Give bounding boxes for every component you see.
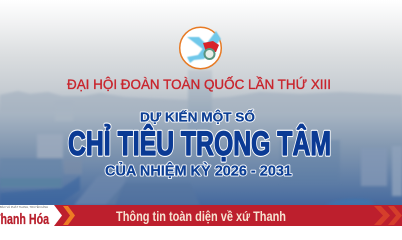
- logo panel: newspaper name: [0, 204, 62, 228]
- heading: congress name: ĐẠI HỘI ĐOÀN TOÀN QUỐC LẦN THỨ XIII: [67, 77, 331, 92]
- heading: intro line: DỰ KIẾN MỘT SỐ: [140, 110, 255, 124]
- heading: term line: CỦA NHIỆM KỲ 2026 - 2031: [105, 162, 292, 180]
- heading: intro line: DỰ KIẾN MỘT SỐ: [140, 110, 255, 124]
- icon: left chevrons: [63, 206, 75, 225]
- logo panel: newspaper name: BÁO VÀ PHÁT THANH, TRUYỀN HÌNH: [0, 204, 48, 209]
- slogan: Thông tin toàn diện về xứ Thanh: [116, 208, 286, 224]
- icon: stylised X: [187, 31, 221, 63]
- footer banner: [0, 204, 402, 228]
- logo: congress emblem: [180, 27, 221, 69]
- heading: term line: CỦA NHIỆM KỲ 2026 - 2031: [105, 162, 292, 180]
- icon: red flag: [203, 41, 219, 52]
- icon: right chevrons: [374, 206, 402, 225]
- icon: wreath badge: [204, 49, 214, 59]
